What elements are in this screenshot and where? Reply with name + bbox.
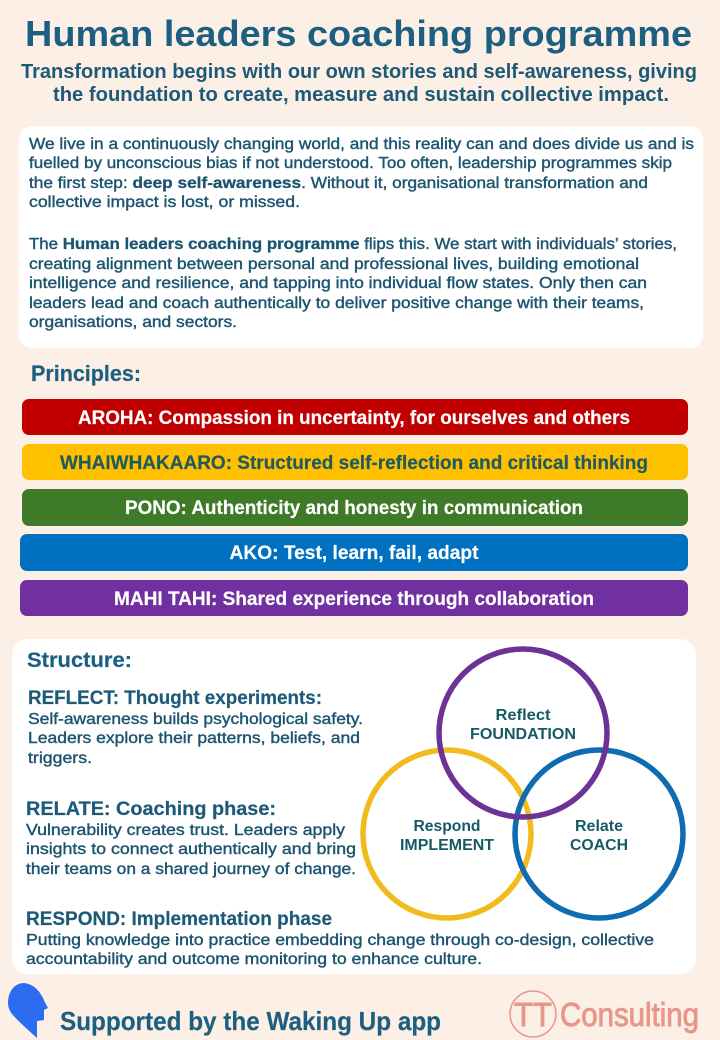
circle: reflect: FOUNDATION — [470, 726, 576, 743]
principle bar: mahi tahi — [20, 580, 688, 616]
principle bar: aroha — [22, 399, 688, 435]
principle bar: whaiwhakaaro: WHAIWHAKAARO: Structured self-reflection and critical thinking — [60, 452, 648, 474]
subtitle: Transformation begins with our own stories and self-awareness, giving — [21, 60, 697, 83]
text block: programme approach: The Human leaders coaching programme flips this. We start with individuals’ stories, — [29, 236, 677, 253]
text block: programme approach: creating alignment between personal and professional lives, building emotional — [29, 256, 639, 273]
logo: tt consulting — [510, 991, 699, 1037]
text block: reflect: REFLECT: Thought experiments: — [28, 687, 322, 709]
text block: respond: accountability and outcome monitoring to enhance culture. — [26, 951, 482, 968]
text block: programme approach: leaders lead and coach authentically to deliver positive change with their teams, — [29, 295, 644, 312]
text block: respond: RESPOND: Implementation phase — [26, 908, 332, 930]
text block: reflect: triggers. — [28, 750, 92, 767]
panel: introduction — [19, 126, 703, 348]
principle bar: ako — [20, 534, 688, 571]
text: supported by: Supported by the Waking Up app — [60, 1006, 441, 1036]
text block: why self-awareness — [29, 136, 694, 211]
text block: relate: insights to connect authentically and bring — [26, 841, 356, 858]
circle: relate: Relate — [575, 818, 623, 835]
circle: respond — [363, 750, 531, 918]
text block: programme approach — [29, 236, 677, 331]
circle: respond: IMPLEMENT — [400, 837, 494, 854]
circle: relate: COACH — [570, 837, 628, 854]
logo: tt consulting: TT — [514, 996, 552, 1033]
text block: why self-awareness: We live in a continuously changing world, and this reality can and does divide us and is — [29, 136, 694, 153]
text block: relate: Vulnerability creates trust. Leaders apply — [26, 822, 345, 839]
text block: relate — [26, 798, 356, 878]
panel: structure — [12, 639, 696, 974]
text block: why self-awareness: the first step: deep self-awareness . Without it, organisational transformation and — [29, 175, 648, 192]
heading: principles: Principles: — [31, 361, 141, 386]
principle bar: whaiwhakaaro — [22, 444, 688, 480]
title: Human leaders coaching programme — [25, 13, 692, 54]
text block: programme approach: intelligence and resilience, and tapping into individual flow states. Only then can — [29, 275, 647, 292]
text block: relate: their teams on a shared journey of change. — [26, 861, 356, 878]
subtitle: the foundation to create, measure and sustain collective impact. — [53, 83, 669, 106]
icon: waking up head — [8, 983, 48, 1038]
text block: respond: Putting knowledge into practice embedding change through co-design, collective — [26, 932, 654, 949]
text block: why self-awareness: collective impact is lost, or missed. — [29, 194, 300, 211]
text block: programme approach: organisations, and sectors. — [29, 314, 237, 331]
logo: tt consulting: Consulting — [560, 996, 699, 1033]
circle: reflect: Reflect — [496, 707, 551, 724]
circle: reflect — [439, 649, 607, 817]
text block: why self-awareness: fuelled by unconscious bias if not understood. Too often, leadership programmes skip — [29, 155, 672, 172]
principle bar: ako: AKO: Test, learn, fail, adapt — [230, 542, 479, 564]
text block: relate: RELATE: Coaching phase: — [26, 798, 276, 820]
circle: respond: Respond — [414, 818, 480, 835]
principle bar: pono: PONO: Authenticity and honesty in communication — [125, 497, 583, 519]
text block: respond — [26, 908, 654, 968]
text block: reflect — [28, 687, 363, 767]
text block: reflect: Self-awareness builds psychological safety. — [28, 711, 363, 728]
principle bar: pono — [22, 489, 688, 526]
text block: reflect: Leaders explore their patterns, beliefs, and — [28, 730, 360, 747]
venn diagram — [363, 649, 683, 918]
principle bar: mahi tahi: MAHI TAHI: Shared experience through collaboration — [114, 588, 594, 610]
circle: relate — [515, 750, 683, 918]
heading: structure: Structure: — [27, 648, 132, 672]
principle bar: aroha: AROHA: Compassion in uncertainty, for ourselves and others — [78, 407, 630, 429]
subtitle — [21, 60, 697, 106]
